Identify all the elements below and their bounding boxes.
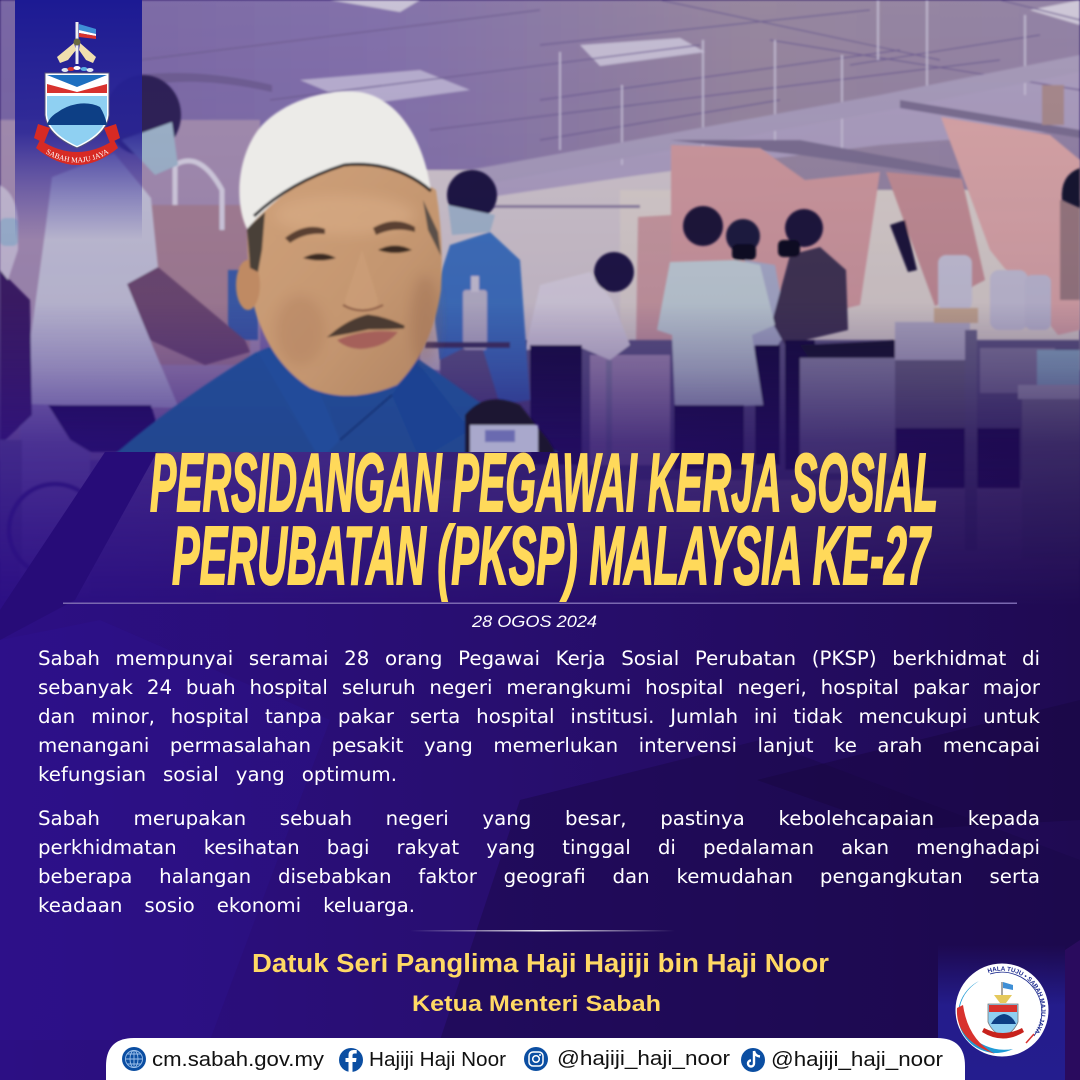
body text: dan minor, hospital tanpa pakar serta hospital institusi. Jumlah ini tidak mencukupi untuk — [38, 705, 1040, 728]
icon: globe — [122, 1047, 146, 1071]
mustache and mouth — [332, 316, 404, 335]
body text: keadaan sosio ekonomi keluarga. — [38, 894, 415, 917]
cap — [239, 91, 431, 229]
contact bar: cm.sabah.gov.my — [152, 1049, 324, 1071]
left nurse and colleague — [0, 75, 250, 600]
icon: facebook — [339, 1048, 363, 1072]
contact bar: @hajiji_haji_noor — [771, 1049, 943, 1071]
icon: tiktok — [741, 1048, 765, 1072]
body text: menangani permasalahan pesakit yang memerlukan intervensi lanjut ke arah mencapai — [38, 734, 1040, 757]
logo: Hala Tuju Sabah Maju Jaya: HALA TUJU • SABAH MAJU JAYA — [987, 966, 1046, 1033]
ward staff and equipment — [440, 168, 1080, 560]
body text: beberapa halangan disebabkan faktor geografi dan kemudahan pengangkutan serta — [38, 865, 1040, 888]
body text: Sabah merupakan sebuah negeri yang besar, pastinya kebolehcapaian kepada — [38, 807, 1040, 830]
body text: sebanyak 24 buah hospital seluruh negeri merangkumi hospital negeri, hospital pakar major — [38, 676, 1040, 699]
microphone — [464, 398, 556, 452]
shirt — [116, 346, 559, 452]
brows and eyes — [285, 227, 325, 243]
pink curtains — [636, 117, 1080, 350]
face — [247, 162, 442, 396]
signature block: Datuk Seri Panglima Haji Hajiji bin Haji Noor — [252, 950, 829, 978]
icon: instagram — [524, 1047, 548, 1071]
crest: Sabah coat of arms: SABAH MAJU JAYA — [46, 150, 109, 163]
date: 28 OGOS 2024 — [471, 613, 597, 631]
contact bar: Hajiji Haji Noor — [369, 1049, 506, 1071]
body text: kefungsian sosial yang optimum. — [38, 763, 397, 786]
hair — [247, 212, 265, 272]
body text: perkhidmatan kesihatan bagi rakyat yang tinggal di pedalaman akan menghadapi — [38, 836, 1040, 859]
crest scroll — [36, 140, 118, 165]
signature block: Ketua Menteri Sabah — [412, 991, 661, 1016]
contact bar: @hajiji_haji_noor — [557, 1048, 730, 1070]
body text: Sabah mempunyai seramai 28 orang Pegawai Kerja Sosial Perubatan (PKSP) berkhidmat di — [38, 647, 1040, 670]
nurse in blue behind speaker — [228, 170, 530, 405]
body text — [38, 647, 1040, 917]
speaker portrait — [116, 90, 559, 452]
